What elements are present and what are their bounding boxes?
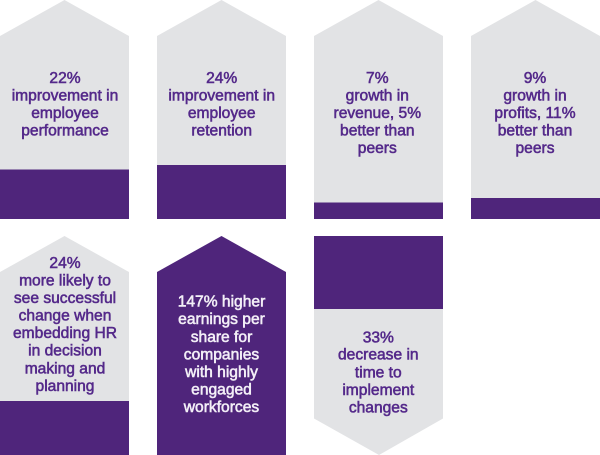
text: 33% decrease in time to implement changes: decrease in: [338, 347, 419, 364]
text: 7% growth in revenue: growth in: [346, 88, 409, 104]
text: 24% more likely to see successful change: planning: [36, 378, 94, 395]
text: 24% more likely to see successful change: making and: [25, 360, 105, 377]
panel: earnings per share: [157, 236, 286, 455]
text: 7% growth in revenue: better than: [340, 123, 415, 140]
text: 33% decrease in time to implement changes: 33%: [363, 329, 394, 346]
text: 22% improvement in employee performance: performance: [21, 123, 109, 140]
text: 24% improvement in employee retention: employee: [188, 105, 256, 122]
text: 33% decrease in time to implement changes: changes: [349, 399, 408, 416]
text: 22% improvement in employee performance: [12, 70, 118, 140]
panel: employee performance: [0, 0, 129, 219]
text: 9% growth in profits: growth in: [503, 88, 567, 104]
text: 147% higher earnings per share: earnings per: [178, 311, 265, 328]
text: 24% improvement in employee retention: improvement in: [168, 88, 275, 104]
text: 33% decrease in time to implement changes: time to: [355, 365, 402, 382]
text: 24% more likely to see successful change: more likely to: [19, 272, 111, 289]
text: 7% growth in revenue: 7%: [366, 70, 389, 87]
text: 22% improvement in employee performance: employee: [31, 105, 99, 122]
text: 9% growth in profits: [494, 70, 576, 157]
text: 147% higher earnings per share: [178, 293, 265, 416]
text: 24% more likely to see successful change: embedding HR: [13, 325, 117, 342]
panel: profit growth: [471, 0, 600, 219]
text: 147% higher earnings per share: 147% higher: [178, 293, 265, 310]
text: 9% growth in profits: profits, 11%: [494, 105, 576, 122]
text: 24% improvement in employee retention: 24%: [206, 70, 237, 87]
text: 24% more likely to see successful change: in decision: [28, 342, 102, 360]
text: 147% higher earnings per share: companies: [184, 347, 259, 364]
text: 147% higher earnings per share: with highly: [184, 364, 258, 381]
text: 9% growth in profits: 9%: [524, 70, 546, 87]
text: 22% improvement in employee performance: improvement in: [12, 88, 118, 104]
text: 24% more likely to see successful change: change when: [19, 308, 111, 324]
text: 24% more likely to see successful change: 24%: [49, 255, 81, 272]
text: 24% improvement in employee retention: retention: [191, 123, 252, 140]
text: 9% growth in profits: peers: [515, 140, 555, 157]
text: 33% decrease in time to implement changes: implement: [342, 382, 415, 399]
text: 7% growth in revenue: [334, 70, 421, 157]
text: 22% improvement in employee performance: 22%: [49, 70, 81, 87]
panel: successful change: [0, 236, 129, 455]
text: 24% more likely to see successful change: [13, 255, 117, 395]
text: 147% higher earnings per share: engaged: [191, 382, 252, 399]
panel: time to implement changes: [314, 236, 443, 455]
text: 24% more likely to see successful change: see successful: [14, 290, 116, 307]
text: 33% decrease in time to implement changes: [338, 329, 419, 416]
text: 9% growth in profits: better than: [498, 123, 572, 140]
text: 147% higher earnings per share: workforces: [183, 399, 259, 416]
text: 24% improvement in employee retention: [168, 70, 275, 140]
text: 7% growth in revenue: peers: [358, 140, 397, 157]
text: 7% growth in revenue: revenue, 5%: [334, 105, 421, 122]
panel: revenue growth: [314, 0, 443, 219]
panel: employee retention: [157, 0, 286, 219]
text: 147% higher earnings per share: share for: [191, 329, 252, 346]
